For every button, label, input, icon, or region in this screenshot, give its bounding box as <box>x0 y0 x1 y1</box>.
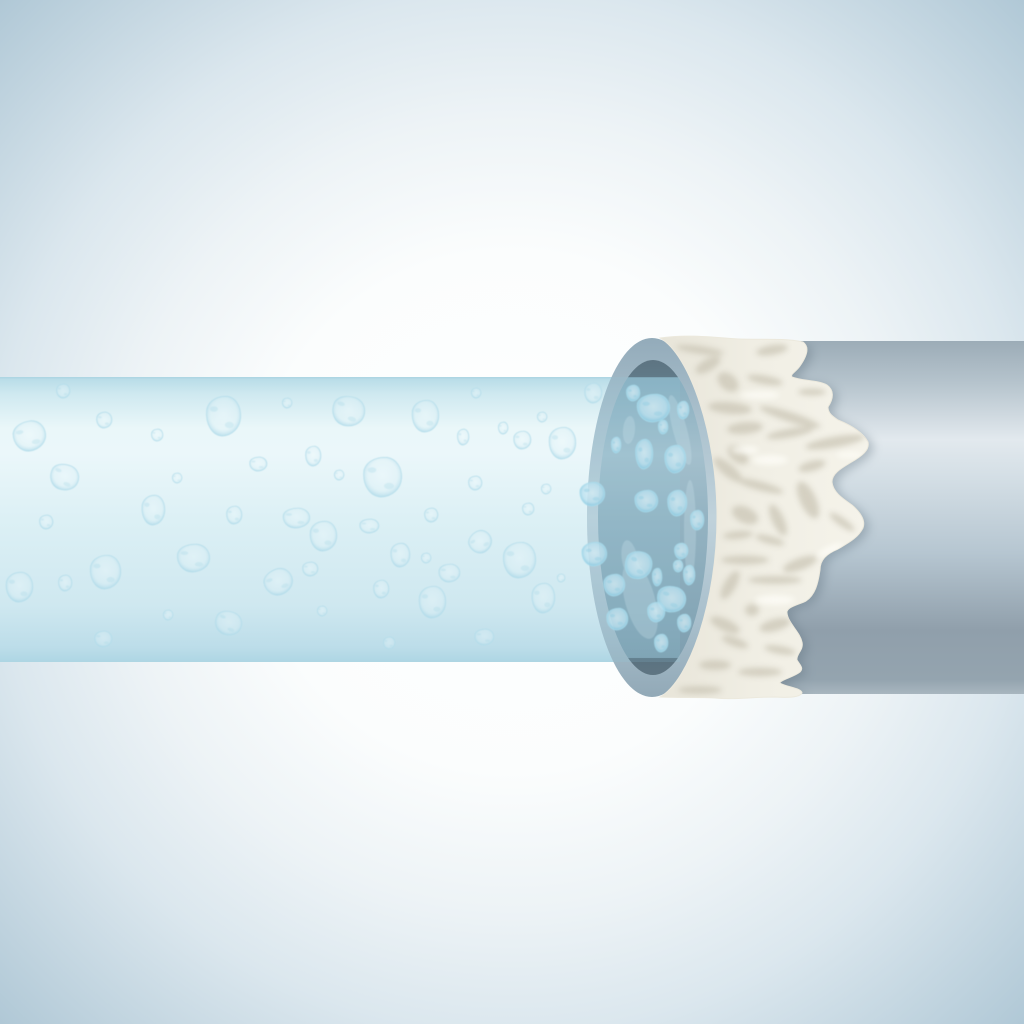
ring outer rim <box>587 338 717 697</box>
transparent water tube <box>0 377 680 662</box>
pipe opening ring <box>586 338 717 697</box>
pale swirl reflections <box>615 393 696 643</box>
grey outer pipe <box>760 341 1024 694</box>
water tint passing through ring <box>586 377 680 662</box>
water bubbles in tube <box>6 383 602 649</box>
water bubbles seen inside pipe opening <box>580 385 704 652</box>
coating shadow on pipe <box>780 344 876 688</box>
cream coating around pipe <box>660 336 868 699</box>
ring inner bore <box>598 360 708 675</box>
coating wrinkle texture <box>676 342 865 694</box>
